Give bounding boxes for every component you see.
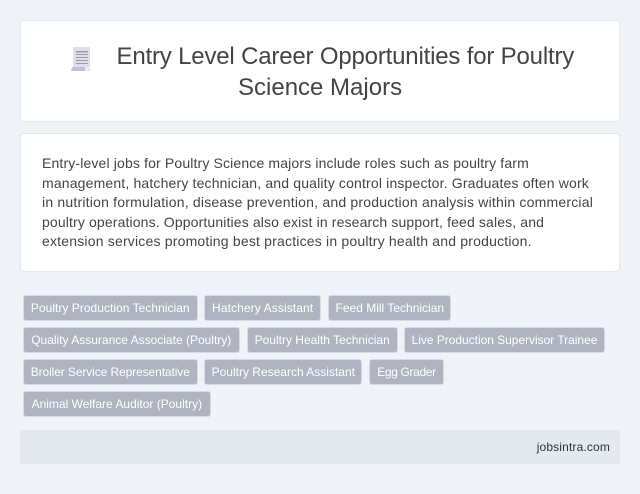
icon: document scroll	[71, 47, 90, 71]
text block: description	[42, 155, 593, 249]
tag list: career roles: Broiler Service Representative	[31, 365, 190, 379]
title	[116, 43, 574, 101]
tag list: career roles: Hatchery Assistant	[212, 301, 313, 315]
footer bar	[20, 430, 620, 464]
tag list: career roles: Live Production Supervisor Trainee	[412, 333, 597, 347]
text block: description: poultry operations. Opportunities also exist in research support, feed sales, and	[42, 214, 544, 230]
text block: description: Entry-level jobs for Poultry Science majors include roles such as poultry farm	[42, 155, 529, 171]
footer source text: jobsintra.com	[537, 440, 610, 454]
title: Entry Level Career Opportunities for Poultry	[116, 43, 574, 70]
tag list: career roles: Animal Welfare Auditor (Poultry)	[32, 397, 202, 411]
tag list: career roles: Poultry Production Technician	[31, 301, 190, 315]
text block: description: in nutrition formulation, disease prevention, and production analysis within commercial	[42, 194, 593, 210]
panel: description	[20, 133, 620, 272]
tag list: career roles	[23, 295, 605, 417]
tag list: career roles: Poultry Health Technician	[255, 333, 390, 347]
text block: description: management, hatchery technician, and quality control inspector. Graduates often work	[42, 175, 589, 191]
tag list: career roles: Poultry Research Assistant	[212, 365, 355, 379]
title: Science Majors	[238, 74, 402, 101]
tag list: career roles: Feed Mill Technician	[336, 301, 444, 315]
panel: title card	[20, 20, 620, 122]
text block: description: extension services promoting best practices in poultry health and production.	[42, 233, 532, 249]
tag list: career roles: Quality Assurance Associate (Poultry)	[31, 333, 231, 347]
tag list: career roles: Egg Grader	[377, 365, 436, 379]
